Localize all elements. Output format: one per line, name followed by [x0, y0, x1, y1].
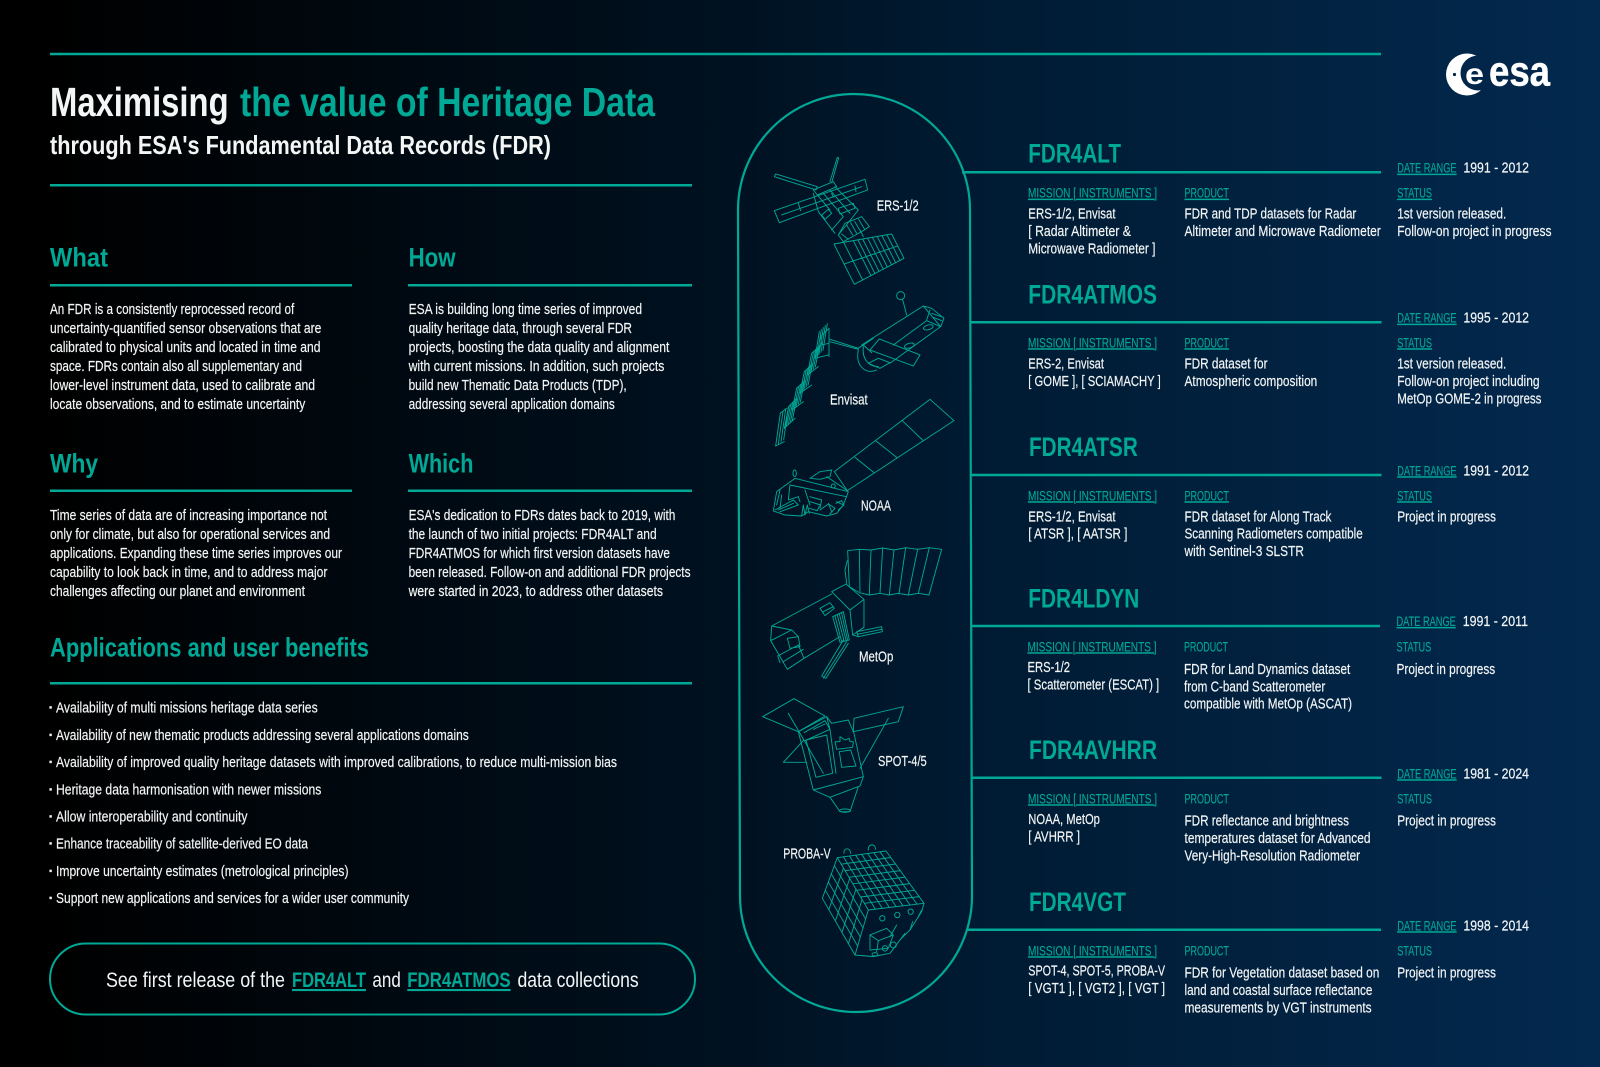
- column: date range and status: Follow-on project in progress: [1397, 223, 1552, 240]
- icon: SPOT-4/5 satellite: SPOT-4/5: [878, 753, 927, 770]
- column: product: Scanning Radiometers compatible: [1184, 526, 1363, 543]
- column: date range and status: DATE RANGE: [1396, 614, 1456, 629]
- column: mission: [ GOME ], [ SCIAMACHY ]: [1028, 373, 1161, 390]
- list: benefits: Availability of multi missions heritage data series: [56, 700, 318, 717]
- text: which: [408, 507, 690, 600]
- column: date range and status: [1397, 917, 1529, 982]
- column: product: FDR dataset for: [1184, 356, 1268, 373]
- column: mission: [ Scatterometer (ESCAT) ]: [1028, 676, 1159, 693]
- column: mission: MISSION [ INSTRUMENTS ]: [1028, 186, 1157, 201]
- column: date range and status: Project in progress: [1397, 508, 1496, 525]
- column: date range and status: 1st version released.: [1397, 356, 1506, 373]
- column: mission: [ ATSR ], [ AATSR ]: [1028, 526, 1127, 543]
- callout: data collections link pill: See first release of the: [106, 969, 285, 992]
- text: what: [50, 301, 321, 413]
- column: product: FDR for Land Dynamics dataset: [1184, 661, 1351, 678]
- heading: applications: Applications and user benefits: [50, 633, 369, 663]
- text: what: lower-level instrument data, used to calibrate and: [50, 377, 315, 394]
- text: why: [50, 507, 342, 600]
- list: benefits: Enhance traceability of satellite-derived EO data: [56, 836, 309, 853]
- text: what: space. FDRs contain also all supplementary and: [50, 358, 302, 375]
- panel: FDR4LDYN: [971, 583, 1528, 713]
- column: product: [1184, 791, 1370, 864]
- list: benefits: ·: [48, 700, 54, 717]
- column: date range and status: STATUS: [1397, 186, 1432, 201]
- list: benefits: [48, 700, 617, 907]
- column: date range and status: STATUS: [1397, 943, 1432, 958]
- text: why: capability to look back in time, and to address major: [50, 564, 327, 581]
- column: date range and status: 1991 - 2012: [1463, 462, 1529, 479]
- column: date range and status: 1991 - 2011: [1463, 613, 1528, 630]
- column: date range and status: [1397, 462, 1529, 525]
- icon: PROBA-V satellite: [783, 845, 924, 957]
- list: benefits: Availability of new thematic products addressing several applications domains: [56, 727, 469, 744]
- panel: FDR4ATSR: [971, 432, 1529, 560]
- icon: MetOp satellite: [771, 548, 942, 678]
- heading: FDR4VGT: FDR4VGT: [1029, 887, 1126, 917]
- icon: Envisat satellite: [776, 292, 944, 446]
- column: mission: ERS-1/2, Envisat: [1028, 206, 1116, 223]
- text: which: the launch of two initial projects: FDR4ALT and: [409, 526, 657, 543]
- logo: esa: [1446, 48, 1551, 96]
- column: product: from C-band Scatterometer: [1184, 678, 1325, 695]
- column: product: PRODUCT: [1184, 488, 1229, 503]
- column: date range and status: DATE RANGE: [1397, 766, 1457, 781]
- title: Maximising: [50, 79, 229, 125]
- column: mission: NOAA, MetOp: [1028, 811, 1100, 828]
- heading: FDR4AVHRR: FDR4AVHRR: [1029, 735, 1157, 765]
- column: date range and status: Follow-on project including: [1397, 373, 1540, 390]
- column: product: land and coastal surface reflectance: [1184, 982, 1372, 999]
- text: how: build new Thematic Data Products (TDP),: [409, 377, 627, 394]
- panel: applications and user benefits: [48, 633, 692, 907]
- icon: ERS-1/2 satellite: ERS-1/2: [877, 198, 919, 215]
- text: what: locate observations, and to estimate uncertainty: [50, 396, 306, 413]
- column: date range and status: [1397, 765, 1529, 830]
- heading: FDR4ATMOS: FDR4ATMOS: [1028, 279, 1157, 309]
- column: product: with Sentinel-3 SLSTR: [1184, 543, 1304, 560]
- text: which: been released. Follow-on and additional FDR projects: [409, 564, 690, 581]
- text: what: calibrated to physical units and located in time and: [50, 339, 320, 356]
- heading: FDR4ATSR: FDR4ATSR: [1029, 432, 1138, 462]
- heading: FDR4ALT: FDR4ALT: [1028, 139, 1121, 169]
- list: benefits: ·: [48, 836, 54, 853]
- column: product: PRODUCT: [1184, 639, 1228, 654]
- column: product: PRODUCT: [1184, 943, 1229, 958]
- heading: why: Why: [50, 448, 98, 478]
- list: benefits: ·: [48, 890, 54, 907]
- column: mission: [1028, 639, 1159, 693]
- panel: which: [408, 448, 692, 600]
- text: how: [408, 301, 670, 413]
- column: date range and status: Project in progress: [1396, 661, 1495, 678]
- column: date range and status: STATUS: [1397, 791, 1432, 806]
- column: date range and status: 1981 - 2024: [1463, 765, 1529, 782]
- icon: Envisat satellite: Envisat: [830, 391, 868, 408]
- column: mission: ERS-1/2: [1028, 659, 1070, 676]
- panel: how: [408, 243, 692, 413]
- column: date range and status: Project in progress: [1397, 965, 1496, 982]
- callout: data collections link pill: [50, 944, 695, 1014]
- heading: what: What: [50, 243, 108, 273]
- column: mission: MISSION [ INSTRUMENTS ]: [1028, 639, 1156, 654]
- list: benefits: ·: [48, 781, 54, 798]
- text: how: ESA is building long time series of improved: [409, 301, 642, 318]
- column: date range and status: [1397, 160, 1552, 240]
- list: benefits: Improve uncertainty estimates (metrological principles): [56, 863, 349, 880]
- panel: FDR4VGT: [966, 887, 1529, 1016]
- column: mission: ERS-2, Envisat: [1028, 356, 1105, 373]
- column: product: compatible with MetOp (ASCAT): [1184, 696, 1352, 713]
- column: date range and status: [1396, 613, 1528, 678]
- text: what: uncertainty-quantified sensor observations that are: [50, 320, 321, 337]
- column: product: PRODUCT: [1184, 791, 1229, 806]
- column: date range and status: 1991 - 2012: [1463, 160, 1529, 177]
- column: mission: [1028, 335, 1161, 390]
- callout: data collections link pill: and: [372, 969, 401, 992]
- text: how: projects, boosting the data quality and alignment: [409, 339, 670, 356]
- heading: which: Which: [409, 448, 473, 478]
- column: mission: MISSION [ INSTRUMENTS ]: [1028, 335, 1157, 350]
- column: product: PRODUCT: [1184, 186, 1229, 201]
- panel: FDR4ALT: [962, 139, 1552, 257]
- icon: MetOp satellite: MetOp: [859, 649, 893, 666]
- column: date range and status: DATE RANGE: [1397, 161, 1457, 176]
- text: why: Time series of data are of increasing importance not: [50, 507, 328, 524]
- icon: ERS-1/2 satellite: [774, 157, 919, 284]
- column: mission: [1028, 791, 1157, 845]
- column: product: temperatures dataset for Advanced: [1184, 830, 1370, 847]
- column: mission: MISSION [ INSTRUMENTS ]: [1028, 943, 1157, 958]
- list: benefits: Allow interoperability and continuity: [56, 808, 248, 826]
- column: date range and status: STATUS: [1397, 488, 1432, 503]
- column: mission: [ VGT1 ], [ VGT2 ], [ VGT ]: [1028, 980, 1165, 997]
- column: mission: SPOT-4, SPOT-5, PROBA-V: [1028, 963, 1165, 980]
- column: product: FDR for Vegetation dataset based on: [1184, 965, 1379, 982]
- logo: esa: esa: [1489, 48, 1551, 94]
- text: which: were started in 2023, to address other datasets: [408, 583, 663, 600]
- column: mission: [1028, 186, 1157, 257]
- list: benefits: ·: [48, 727, 54, 744]
- column: mission: [ AVHRR ]: [1028, 828, 1080, 845]
- list: benefits: Support new applications and services for a wider user community: [56, 890, 409, 907]
- column: product: Atmospheric composition: [1184, 373, 1317, 390]
- text: how: addressing several application domains: [409, 396, 615, 413]
- column: product: FDR reflectance and brightness: [1184, 813, 1349, 830]
- callout: data collections link pill: FDR4ALT: [292, 969, 366, 992]
- list: benefits: ·: [48, 754, 54, 771]
- column: product: PRODUCT: [1184, 335, 1229, 350]
- panel: satellite capsule outline: [738, 94, 972, 1012]
- list: benefits: Heritage data harmonisation with newer missions: [56, 781, 321, 798]
- column: mission: [1028, 488, 1157, 543]
- column: mission: MISSION [ INSTRUMENTS ]: [1028, 791, 1157, 806]
- list: benefits: ·: [48, 863, 54, 880]
- text: why: challenges affecting our planet and environment: [50, 583, 306, 600]
- column: date range and status: [1397, 310, 1542, 407]
- column: date range and status: DATE RANGE: [1397, 463, 1457, 478]
- panel: FDR4ATMOS: [971, 279, 1542, 407]
- heading: how: How: [409, 243, 456, 273]
- column: mission: MISSION [ INSTRUMENTS ]: [1028, 488, 1157, 503]
- icon: NOAA satellite: [773, 399, 954, 516]
- list: benefits: ·: [48, 808, 54, 826]
- column: product: [1184, 639, 1352, 713]
- column: mission: Microwave Radiometer ]: [1028, 240, 1155, 257]
- title: [50, 79, 656, 125]
- icon: SPOT-4/5 satellite: [763, 699, 927, 812]
- panel: what: [50, 243, 352, 413]
- text: which: ESA's dedication to FDRs dates back to 2019, with: [409, 507, 675, 524]
- column: product: [1184, 488, 1363, 560]
- column: date range and status: 1st version released.: [1397, 206, 1506, 223]
- text: why: applications. Expanding these time series improves our: [50, 545, 342, 562]
- column: date range and status: DATE RANGE: [1397, 311, 1457, 326]
- list: benefits: Availability of improved quality heritage datasets with improved calibrations, to reduce multi-mission bias: [56, 754, 617, 771]
- heading: FDR4LDYN: FDR4LDYN: [1028, 583, 1139, 613]
- subtitle: through ESA's Fundamental Data Records (FDR): [50, 130, 551, 160]
- column: date range and status: MetOp GOME-2 in progress: [1397, 390, 1542, 407]
- logo: esa: e: [1465, 58, 1484, 91]
- column: date range and status: DATE RANGE: [1397, 918, 1457, 933]
- column: date range and status: Project in progress: [1397, 813, 1496, 830]
- column: mission: ERS-1/2, Envisat: [1028, 508, 1116, 525]
- column: product: Altimeter and Microwave Radiometer: [1184, 223, 1381, 240]
- panel: FDR4AVHRR: [972, 735, 1529, 864]
- column: date range and status: STATUS: [1396, 639, 1431, 654]
- icon: PROBA-V satellite: PROBA-V: [783, 846, 831, 863]
- column: mission: [ Radar Altimeter &: [1028, 223, 1131, 240]
- text: which: FDR4ATMOS for which first version datasets have: [409, 545, 670, 562]
- icon: NOAA satellite: NOAA: [861, 498, 891, 515]
- text: why: only for climate, but also for operational services and: [50, 526, 330, 543]
- column: date range and status: 1995 - 2012: [1463, 310, 1529, 327]
- text: how: quality heritage data, through several FDR: [409, 320, 632, 337]
- text: how: with current missions. In addition, such projects: [408, 358, 664, 375]
- callout: data collections link pill: data collections: [518, 969, 639, 992]
- column: date range and status: STATUS: [1397, 335, 1432, 350]
- column: product: [1184, 943, 1379, 1016]
- text: what: An FDR is a consistently reprocessed record of: [50, 301, 295, 318]
- panel: why: [50, 448, 352, 600]
- column: product: FDR dataset for Along Track: [1184, 508, 1332, 525]
- column: mission: [1028, 943, 1165, 997]
- column: product: FDR and TDP datasets for Radar: [1184, 206, 1356, 223]
- callout: data collections link pill: FDR4ATMOS: [407, 969, 511, 992]
- column: date range and status: 1998 - 2014: [1463, 917, 1529, 934]
- column: product: [1184, 186, 1381, 240]
- column: product: measurements by VGT instruments: [1184, 999, 1372, 1016]
- column: product: [1184, 335, 1317, 390]
- column: product: Very-High-Resolution Radiometer: [1184, 847, 1360, 864]
- title: the value of Heritage Data: [240, 79, 656, 125]
